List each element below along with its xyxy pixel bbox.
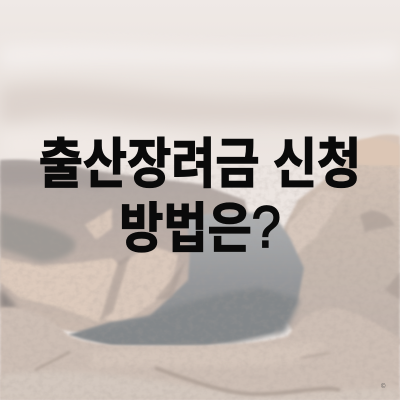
foreground rock: [0, 308, 400, 400]
watermark mark: ©: [381, 384, 385, 390]
dark tree shadow on left slope: [0, 165, 110, 308]
cliff streaks: [100, 211, 400, 320]
title: [39, 135, 361, 261]
rock grain texture: [0, 165, 400, 400]
distant ridge and left cliffs: [0, 159, 265, 345]
title: 출산장려금 신청: [39, 135, 361, 195]
valley floor: [68, 212, 304, 346]
title: 방법은?: [119, 196, 281, 261]
right mountain with dome: [262, 134, 400, 345]
sunlit granite faces: [0, 138, 400, 325]
